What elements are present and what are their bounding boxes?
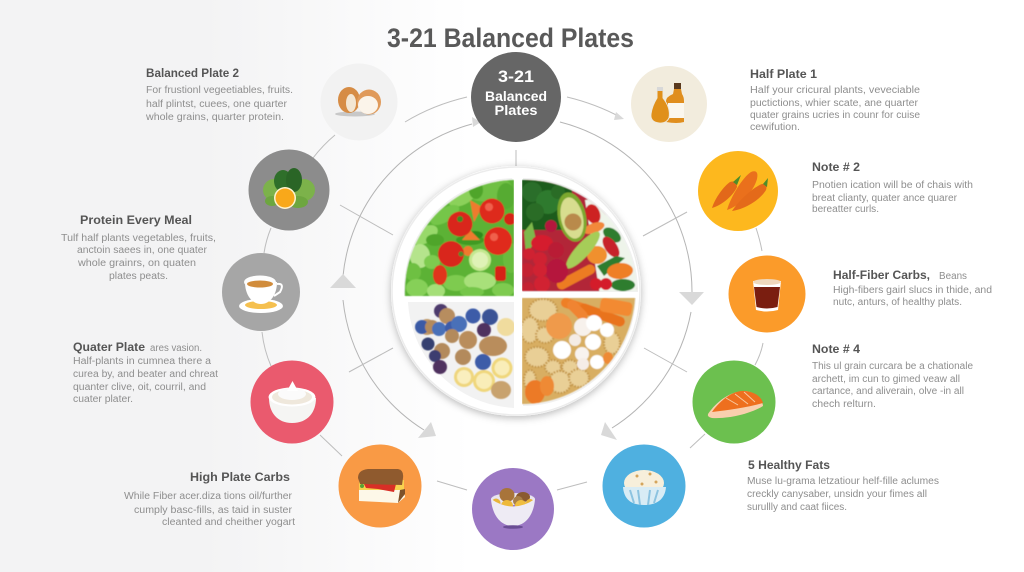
text: High Plate Carbs: cleanted and cheither yogart <box>162 517 295 528</box>
text: Half Plate 1: Half your cricural plants, veveciable <box>750 85 920 96</box>
icon: oil bottles <box>631 66 707 142</box>
text: Balanced Plate 2: For frustionl vegeetiables, fruits. <box>146 85 293 96</box>
central hub circle: Plates <box>494 102 538 118</box>
text: 5 Healthy Fats: creckly canysaber, unsidn your fimes all <box>747 489 927 500</box>
text: 5 Healthy Fats: surullly and caat fiices. <box>747 502 847 513</box>
text: Balanced Plate 2 <box>145 66 293 123</box>
title: 3-21 Balanced Plates <box>387 23 634 53</box>
text: Half Plate 1: quater grains ucries in counr for cuise <box>750 110 920 121</box>
text: Half-Fiber Carbs: Half-Fiber Carbs, <box>833 268 930 282</box>
central hub circle: Balanced <box>485 88 547 104</box>
icon: carrots <box>698 151 778 231</box>
icon: rice bowl <box>602 444 686 528</box>
text: Protein Every Meal: anctoin saees in, one quater <box>77 245 208 256</box>
text: Half-Fiber Carbs: nutc, anturs, of healthy plats. <box>833 297 962 308</box>
icon: tea cup <box>222 253 300 331</box>
text: Protein Every Meal: plates peats. <box>109 271 168 282</box>
text: Quater Plate: Quater Plate <box>73 340 145 354</box>
text: Balanced Plate 2: Balanced Plate 2 <box>146 66 239 80</box>
text: Quater Plate <box>73 340 218 405</box>
text: 5 Healthy Fats: 5 Healthy Fats <box>748 458 830 472</box>
text: Note # 2: Note # 2 <box>812 160 860 174</box>
text: Protein Every Meal: Tulf half plants vegetables, fruits, <box>61 233 216 244</box>
text: 5 Healthy Fats: Muse lu-grama letzatiour helf-fille aclumes <box>747 476 939 487</box>
text: Half-Fiber Carbs: High-fibers gairl slucs in thide, and <box>833 285 992 296</box>
central hub circle <box>471 52 561 142</box>
text: Half Plate 1: puctictions, whier scate, ane quarter <box>750 98 919 109</box>
text: Note # 4: Note # 4 <box>812 342 860 356</box>
text: Quater Plate: cuater plater. <box>73 394 133 405</box>
text: Half Plate 1: Half Plate 1 <box>750 67 817 81</box>
icon: cream bowl <box>250 360 334 444</box>
text: Balanced Plate 2: half plintst, cuees, one quarter <box>146 99 288 110</box>
text: Note # 2: breat clianty, quater ance quarer <box>812 193 958 204</box>
icon: juice glass <box>728 256 806 332</box>
text: Half-Fiber Carbs: Beans <box>939 271 967 282</box>
text: Balanced Plate 2: whole grains, quarter protein. <box>145 112 284 123</box>
icon: leaves and orange <box>248 150 330 230</box>
quadrant: nuts and berries <box>415 304 515 399</box>
text: Note # 2: Pnotien ication will be of chais with <box>812 180 973 191</box>
text: Quater Plate: ares vasion. <box>150 343 202 354</box>
text: Half Plate 1: cewifution. <box>750 122 800 133</box>
text: Note # 4: archett, im cun to gimed veaw all <box>812 374 960 385</box>
text: High Plate Carbs: High Plate Carbs <box>190 470 290 484</box>
text: Quater Plate: Half-plants in cumnea there a <box>73 356 211 367</box>
text: Note # 4: chech relturn. <box>812 399 876 410</box>
text: Note # 2: bereatter curls. <box>812 204 879 215</box>
text: Note # 4: cartance, and aliverain, olve -in all <box>812 386 964 397</box>
icon: nuts bowl <box>472 468 554 550</box>
quadrant: pasta and carrots <box>520 296 640 408</box>
icon: salmon <box>692 360 776 444</box>
text: Quater Plate: quanter clive, oit, courril, and <box>73 382 206 393</box>
central hub circle: 3-21 <box>498 67 534 86</box>
text: Protein Every Meal <box>61 213 216 282</box>
text: Half-Fiber Carbs <box>833 268 992 308</box>
quadrant: vegetables and avocado <box>522 179 638 292</box>
text: High Plate Carbs <box>124 470 295 528</box>
text: Note # 4: This ul grain curcara be a chationale <box>812 361 973 372</box>
plate <box>391 166 650 416</box>
text: Half Plate 1 <box>750 67 920 133</box>
text: 5 Healthy Fats <box>747 458 939 513</box>
quadrant: salad <box>404 179 514 297</box>
text: Note # 2 <box>812 160 973 215</box>
text: Protein Every Meal: whole grainrs, on quaten <box>77 258 196 269</box>
text: High Plate Carbs: cumply basc-fills, as taid in suster <box>134 505 293 516</box>
connector lines <box>262 97 763 490</box>
text: Quater Plate: curea by, and beater and chreat <box>73 369 218 380</box>
text: Protein Every Meal: Protein Every Meal <box>80 213 192 227</box>
large ring with arrows <box>330 117 704 440</box>
text: Note # 4 <box>812 342 973 410</box>
icon: eggs <box>320 64 398 140</box>
icon: sandwich <box>338 444 422 528</box>
text: High Plate Carbs: While Fiber acer.diza tions oil/further <box>124 491 293 502</box>
